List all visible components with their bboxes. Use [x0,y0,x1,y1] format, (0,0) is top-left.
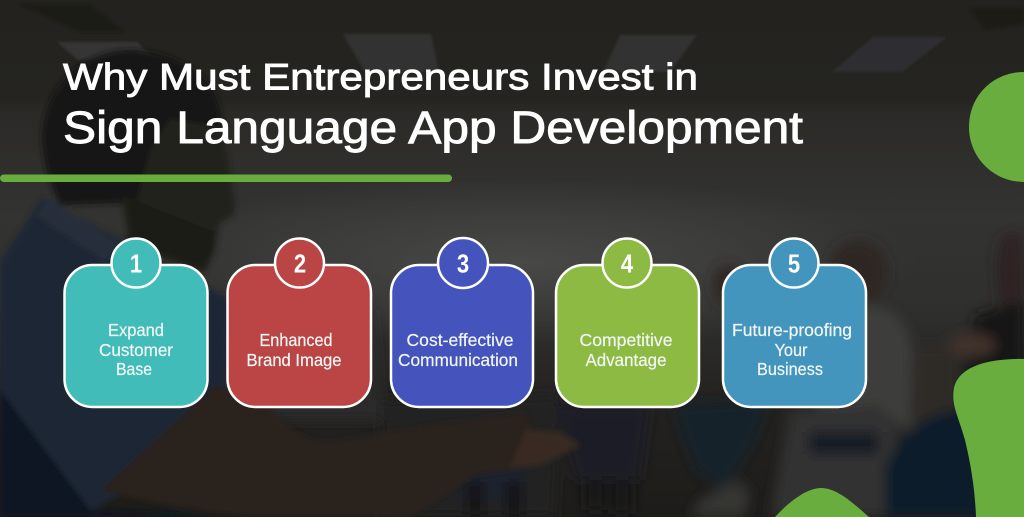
decorative shape: green blob top right [969,72,1024,182]
decorative shape: green blob bottom centre [775,488,869,517]
card 1: Expand Customer Base [64,238,208,407]
card 3: Cost-effective Communication: Cost-effective [406,330,514,350]
card 3: Cost-effective Communication: 3 [457,250,469,279]
card 4: Competitive Advantage: 4 [621,250,634,279]
card 3: Cost-effective Communication [391,238,533,407]
card 1: Expand Customer Base: Expand [108,320,164,340]
title: Sign Language App Development [63,102,804,153]
decorative shape: green blob bottom right [953,359,1024,517]
card 1: Expand Customer Base: Customer [99,340,173,360]
title underline [0,174,452,182]
card 2: Enhanced Brand Image: 2 [294,250,306,279]
card 5: Future-proofing Your Business: Future-proofing [732,320,852,340]
card 4: Competitive Advantage: Advantage [586,350,666,370]
card 5: Future-proofing Your Business [723,238,866,407]
card 3: Cost-effective Communication: Communication [398,350,518,370]
card 4: Competitive Advantage: Competitive [580,330,672,350]
card 2: Enhanced Brand Image: Enhanced [260,330,332,350]
card 5: Future-proofing Your Business: 5 [788,250,800,279]
card 5: Future-proofing Your Business: Your [774,340,808,360]
card 1: Expand Customer Base: Base [116,359,152,379]
card 1: Expand Customer Base: 1 [130,250,142,279]
card 5: Future-proofing Your Business: Business [757,359,823,379]
card 2: Enhanced Brand Image [228,238,371,407]
card 2: Enhanced Brand Image: Brand Image [246,350,342,370]
title [63,56,804,153]
card 4: Competitive Advantage [556,238,699,407]
title: Why Must Entrepreneurs Invest in [63,56,698,98]
